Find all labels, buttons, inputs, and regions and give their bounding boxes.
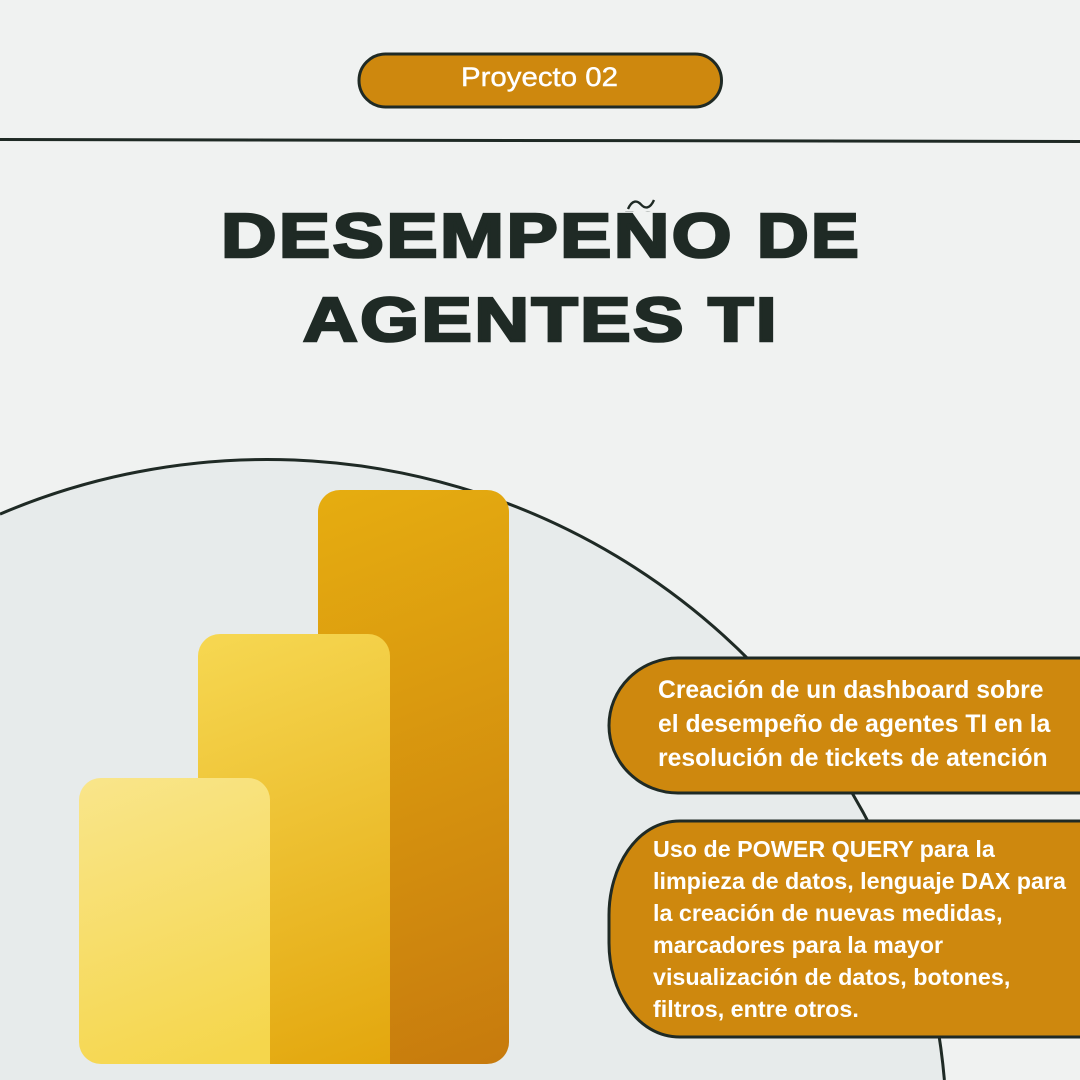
background circle (0, 459, 944, 1080)
callout: tools used: filtros, entre otros. (653, 996, 859, 1022)
callout: dashboard description (609, 658, 1080, 793)
callout: tools used: la creación de nuevas medidas, (653, 900, 1003, 926)
callout: dashboard description: Creación de un dashboard sobre (658, 677, 1043, 704)
callout: dashboard description: el desempeño de agentes TI en la (658, 711, 1051, 738)
callout: tools used: Uso de POWER QUERY para la (653, 836, 996, 862)
top pill badge: Proyecto 02 (461, 62, 618, 92)
top pill badge (359, 54, 722, 107)
callout: tools used: visualización de datos, botones, (653, 964, 1010, 990)
callout: tools used: marcadores para la mayor (653, 932, 943, 958)
title: DESEMPEÑO (221, 202, 734, 271)
title: AGENTES (303, 286, 686, 355)
short bar (79, 778, 270, 1064)
header divider line (0, 140, 1080, 142)
tall bar (318, 490, 509, 1064)
title: TI (708, 286, 779, 355)
callout: tools used: limpieza de datos, lenguaje DAX para (653, 868, 1067, 894)
middle bar (198, 634, 390, 1064)
title: DE (757, 202, 861, 271)
callout: dashboard description: resolución de tickets de atención (658, 745, 1048, 772)
callout: tools used (609, 821, 1080, 1037)
icon: Power BI bars (79, 490, 509, 1064)
title (221, 192, 861, 355)
